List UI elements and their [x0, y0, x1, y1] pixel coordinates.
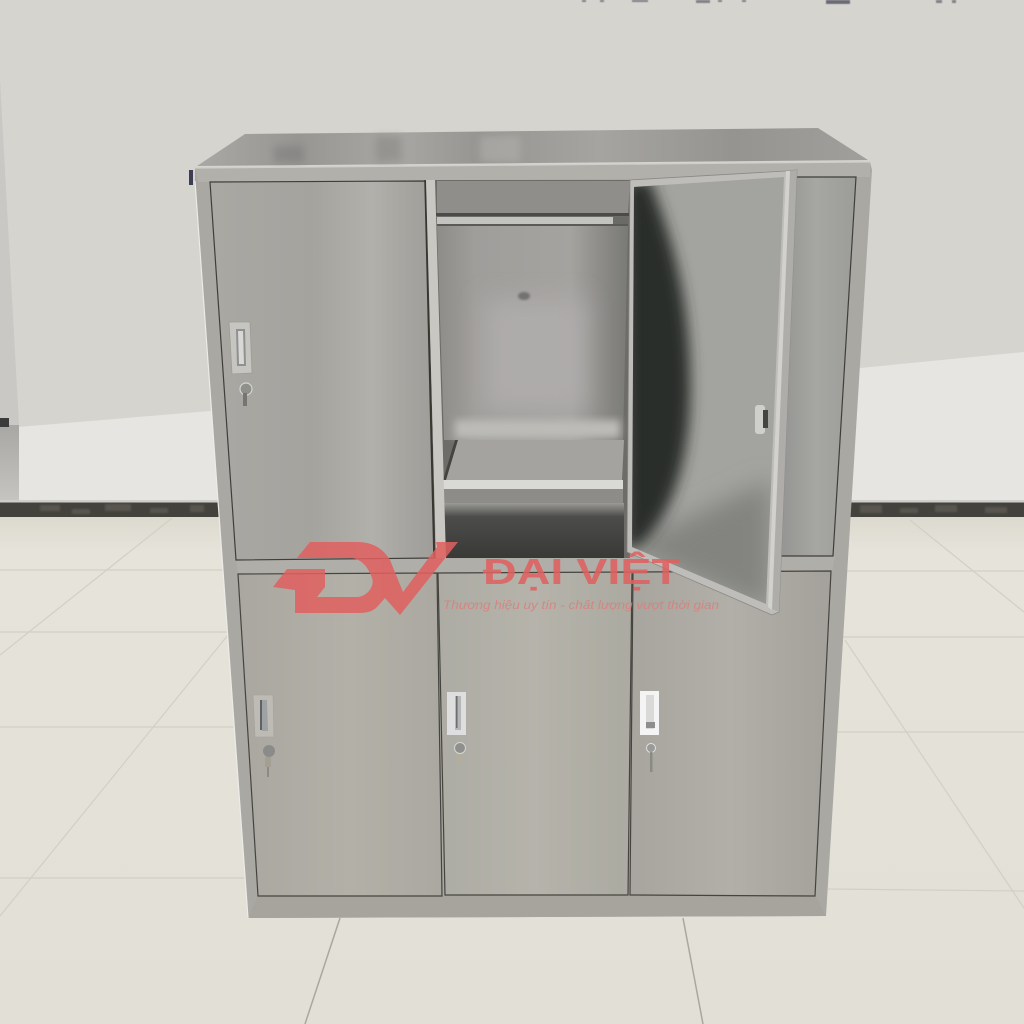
- back panel highlights: [485, 300, 585, 410]
- latch: [755, 405, 768, 434]
- cabinet top reflections: [274, 136, 520, 162]
- upper right door: [776, 177, 856, 556]
- lock: [646, 744, 656, 772]
- cabinet: [189, 128, 872, 918]
- cabinet top surface: [197, 128, 868, 166]
- cabinet front frame: [195, 162, 872, 918]
- upper section: [437, 181, 630, 214]
- open compartment: [425, 180, 632, 558]
- lock: [263, 745, 275, 777]
- back panel: [437, 226, 628, 440]
- compartment floor: [444, 503, 624, 558]
- logo tagline: Thương hiệu uy tín - chất lượng vượt thời gian: [443, 598, 719, 612]
- hanging rail: [437, 217, 613, 224]
- door inner panel: [632, 177, 784, 604]
- wall background: [0, 0, 1024, 520]
- handle: [447, 692, 466, 735]
- lower door 2: [438, 572, 632, 895]
- lock: [240, 383, 252, 406]
- baseboard: [0, 500, 1024, 530]
- door reflections: [625, 180, 770, 610]
- floor tiles: [0, 517, 1024, 1024]
- logo mark DV: [273, 542, 458, 615]
- left post: [426, 180, 446, 558]
- top edge marks: [582, 0, 956, 4]
- handle: [640, 691, 659, 735]
- lower door 3: [630, 571, 831, 896]
- lower door 1: [238, 573, 442, 896]
- open door: [625, 170, 797, 615]
- upper left door: [210, 181, 435, 560]
- logo wordmark: ĐẠI VIỆT: [483, 550, 680, 592]
- handle: [253, 695, 274, 737]
- shelf: [443, 440, 624, 480]
- handle: [229, 322, 252, 374]
- lock: [454, 742, 466, 764]
- logo: Đại Việt: [273, 542, 719, 615]
